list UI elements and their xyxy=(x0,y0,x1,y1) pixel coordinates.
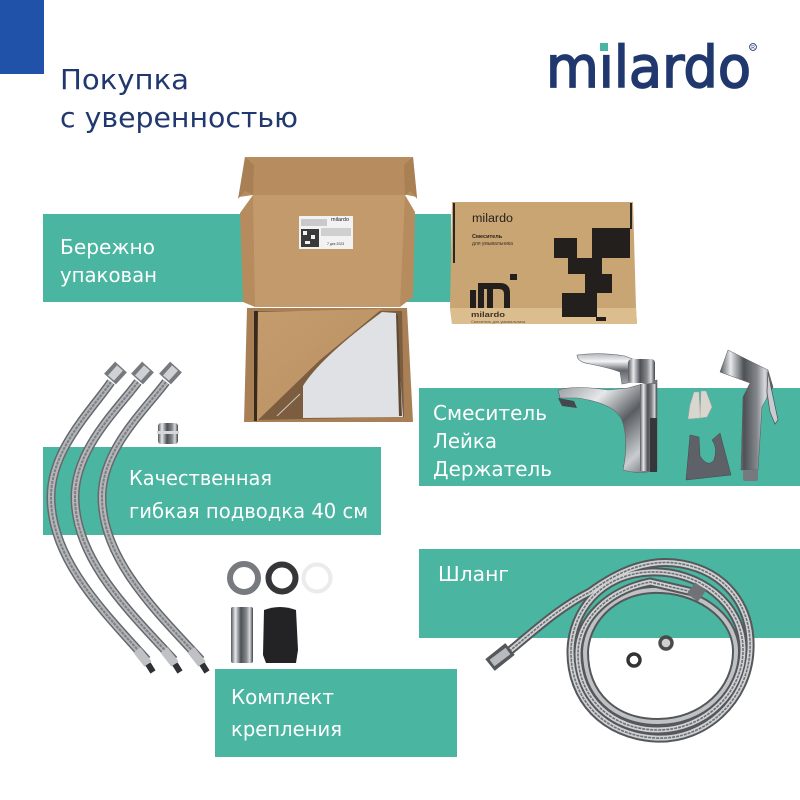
shipping label xyxy=(299,216,353,249)
shower hose xyxy=(490,562,750,738)
flexible hoses xyxy=(51,367,207,672)
nipple fitting xyxy=(157,423,179,444)
panel: faucet, sprayer, holder: Держатель xyxy=(433,457,552,481)
closed product box xyxy=(450,202,637,324)
open cardboard box xyxy=(238,157,417,422)
corner accent xyxy=(0,0,44,74)
panel: shower hose xyxy=(419,549,800,638)
panel: flexible hoses: гибкая подводка 40 см xyxy=(129,499,368,523)
panel: faucet, sprayer, holder: Лейка xyxy=(433,429,497,453)
panel: mounting kit: Комплект xyxy=(231,685,334,709)
logo: milardo: milardo xyxy=(546,35,751,101)
closed product box: Смеситель xyxy=(472,234,503,240)
title: с уверенностью xyxy=(60,101,298,134)
panel: flexible hoses: Качественная xyxy=(129,466,272,490)
mounting parts xyxy=(230,564,330,663)
closed product box: milardo xyxy=(472,213,513,225)
title: Покупка xyxy=(60,63,189,96)
anchors xyxy=(688,391,712,419)
panel: mounting kit xyxy=(215,669,457,757)
holder xyxy=(686,433,731,480)
box pattern xyxy=(470,228,630,321)
panel: faucet, sprayer, holder xyxy=(419,388,800,486)
panel: carefully packed: Бережно xyxy=(60,235,155,259)
panel: carefully packed xyxy=(43,214,451,302)
closed product box: Смеситель для умывальника xyxy=(471,319,526,324)
closed product box: для умывальника xyxy=(472,241,513,247)
faucet xyxy=(558,354,657,472)
panel: faucet, sprayer, holder: Смеситель xyxy=(433,401,547,425)
panel: carefully packed: упакован xyxy=(60,263,157,287)
logo: milardo: R xyxy=(751,45,755,51)
title xyxy=(60,63,298,134)
closed product box: milardo xyxy=(471,312,505,319)
shipping label: 7 дек 2023 xyxy=(327,242,344,246)
sprayer xyxy=(720,350,778,481)
panel: shower hose: Шланг xyxy=(438,562,509,586)
shipping label: milardo xyxy=(331,217,349,223)
panel: flexible hoses xyxy=(43,447,381,535)
panel: mounting kit: крепления xyxy=(231,717,342,741)
